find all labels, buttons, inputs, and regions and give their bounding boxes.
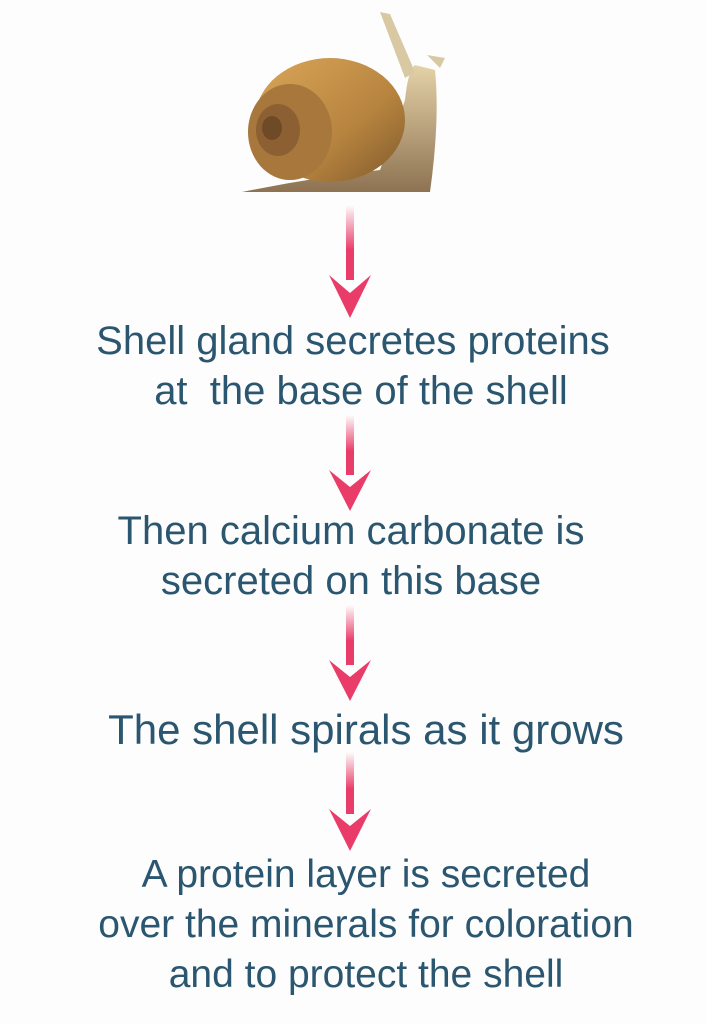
- text: step 1: Shell gland secretes proteins: [96, 319, 610, 363]
- text: step 3: The shell spirals as it grows: [108, 706, 624, 753]
- text: step 2: Then calcium carbonate is: [118, 509, 584, 553]
- text: step 4: A protein layer is secreted: [142, 853, 590, 896]
- text: step 4: over the minerals for coloration: [98, 903, 634, 946]
- text: step 2: [118, 509, 584, 603]
- icon: snail: [242, 12, 445, 192]
- text: step 1: [96, 319, 610, 413]
- arrow 3: [329, 606, 371, 701]
- text: step 1: at the base of the shell: [154, 369, 568, 413]
- arrow 4: [329, 754, 371, 851]
- text: step 4: [98, 853, 634, 996]
- arrow 1: [329, 207, 371, 318]
- arrow 2: [329, 416, 371, 511]
- text: step 2: secreted on this base: [161, 559, 541, 603]
- text: step 4: and to protect the shell: [169, 953, 563, 996]
